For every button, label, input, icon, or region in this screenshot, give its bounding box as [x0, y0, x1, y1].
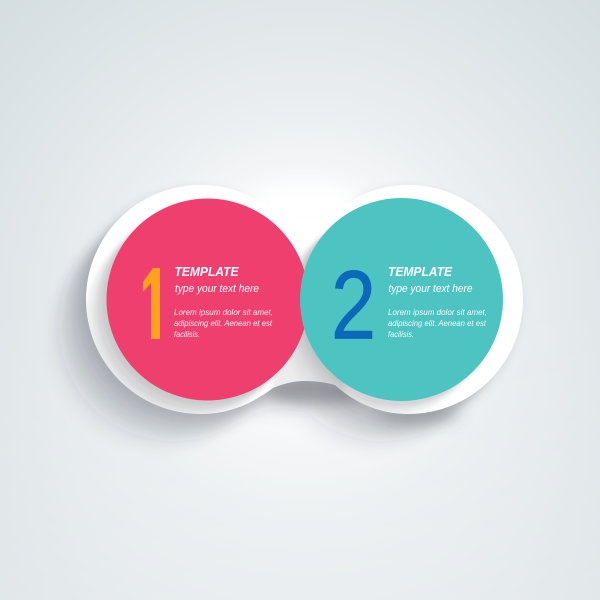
body line 1: Lorem ipsum dolor sit amet, — [388, 307, 487, 317]
panel: step 2 circle — [300, 198, 503, 401]
heading: step 2: TEMPLATE — [388, 265, 453, 279]
body line 3: facilisis. — [174, 329, 200, 339]
white backing shape — [86, 185, 523, 414]
long drop shadow of white shape — [46, 188, 520, 454]
number 2: 2 — [331, 250, 376, 360]
body line 2: adipiscing elit. Aenean et est — [388, 318, 487, 328]
subheading: step 1: type your text here — [175, 283, 259, 295]
heading: step 1: TEMPLATE — [174, 265, 239, 279]
panel: step 1 circle — [106, 198, 308, 400]
text block: step 2 — [388, 265, 487, 339]
body line 1: Lorem ipsum dolor sit amet, — [174, 307, 273, 317]
text block: step 1 — [174, 265, 273, 339]
circle shadows on white shape — [86, 218, 478, 414]
body line 3: facilisis. — [388, 329, 414, 339]
number 1: 1 — [130, 249, 170, 361]
soft glow above the join — [243, 184, 367, 232]
shadow under the waist — [267, 379, 462, 425]
body line 2: adipiscing elit. Aenean et est — [174, 318, 273, 328]
subheading: step 2: type your text here — [388, 283, 472, 295]
